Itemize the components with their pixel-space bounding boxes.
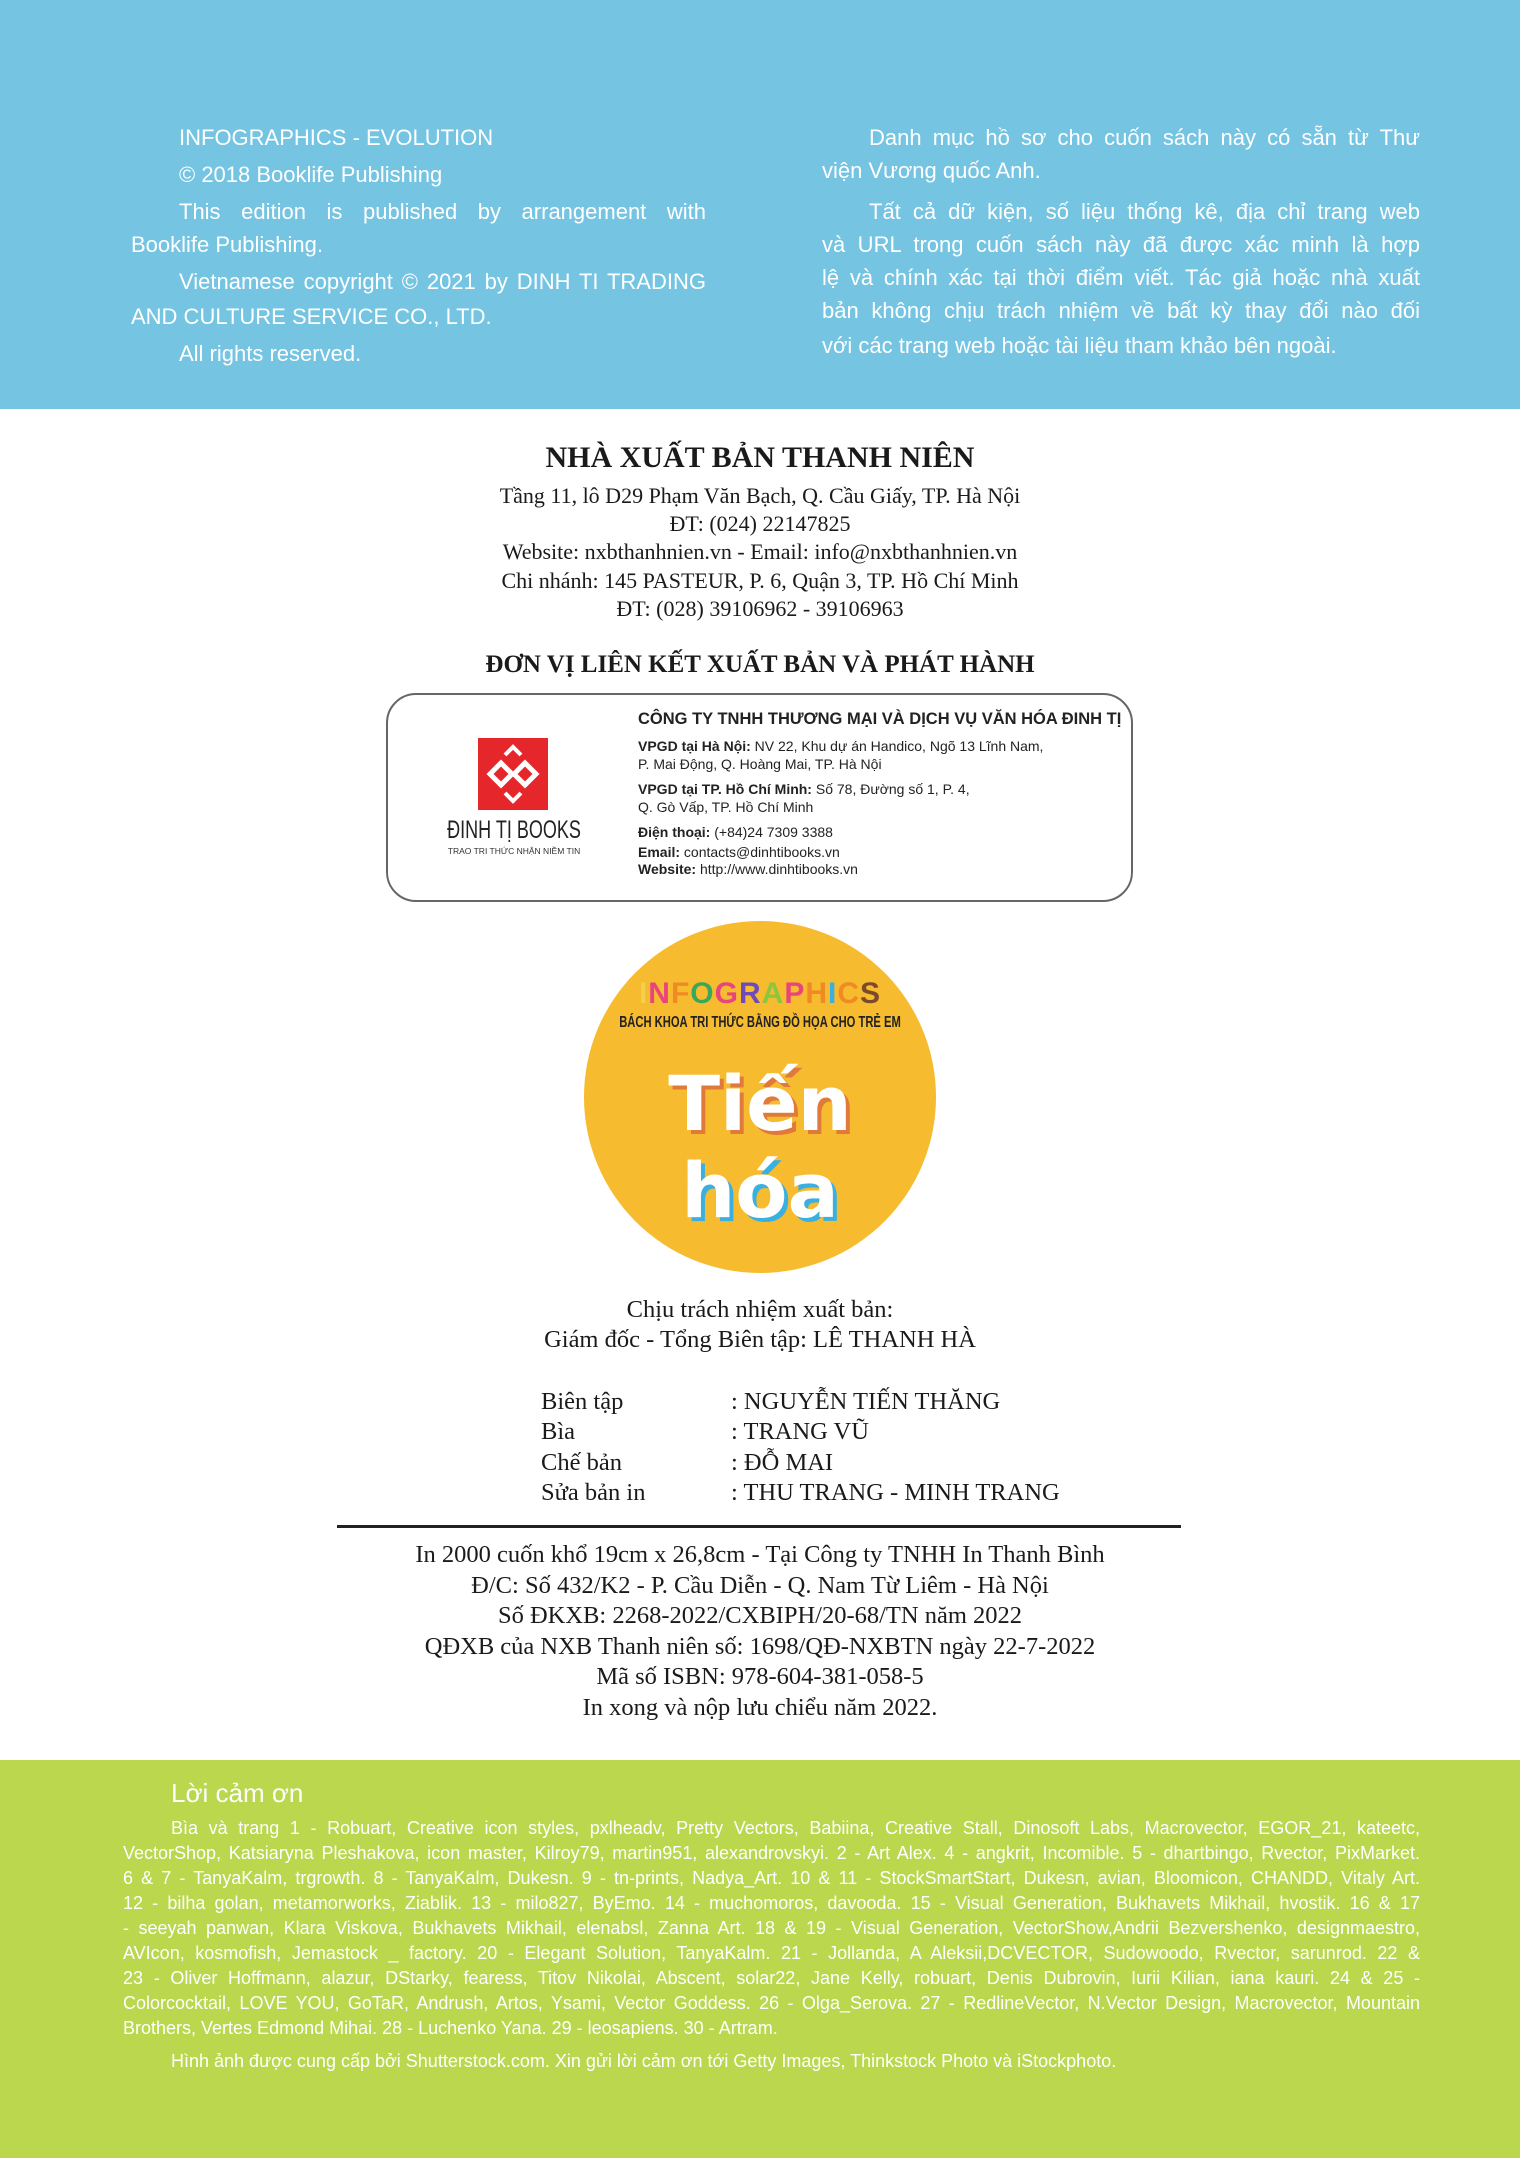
text block: credits list: 23 - Oliver Hoffmann, alazur, DStarky, fearess, Titov Nikolai, Abscent, solar22, Jane Kelly, robuart, Denis Dubrovin, Iurii Kilian, iana kauri. 24 & 25 - xyxy=(123,1968,1420,1988)
text block: publisher address: Tầng 11, lô D29 Phạm Văn Bạch, Q. Cầu Giấy, TP. Hà Nội xyxy=(500,483,1020,508)
heading: partner: ĐƠN VỊ LIÊN KẾT XUẤT BẢN VÀ PHÁT HÀNH xyxy=(485,651,1035,678)
text block: company info: Điện thoại: (+84)24 7309 3388 xyxy=(638,824,833,840)
text block: credits: : TRANG VŨ xyxy=(731,1418,869,1445)
text: logo name: ĐINH TỊ BOOKS xyxy=(447,816,581,844)
text block: left copyright: © 2018 Booklife Publishing xyxy=(179,162,442,187)
text block: credits list: AVIcon, kosmofish, Jemastock _ factory. 20 - Elegant Solution, TanyaKalm. 21 - Jollanda, A Aleksii,DCVECTOR, Sudowoodo, Rvector, sarunrod. 22 & xyxy=(123,1943,1420,1963)
text block: publisher address: ĐT: (024) 22147825 xyxy=(670,511,850,536)
text block: publisher address: ĐT: (028) 39106962 - 39106963 xyxy=(616,596,904,621)
text block: print info: Số ĐKXB: 2268-2022/CXBIPH/20-68/TN năm 2022 xyxy=(498,1602,1022,1629)
text block: print info: In 2000 cuốn khổ 19cm x 26,8cm - Tại Công ty TNHH In Thanh Bình xyxy=(415,1541,1105,1568)
panel: blue header xyxy=(0,0,1520,409)
text block: credits list: 6 & 7 - TanyaKalm, trgrowth. 8 - TanyaKalm, Dukesn. 9 - tn-prints, Nadya_Art. 10 & 11 - StockSmartStart, Dukesn, avian, Bloomicon, CHANDD, Vitaly Art. xyxy=(123,1868,1420,1888)
text block: print info: In xong và nộp lưu chiểu năm 2022. xyxy=(583,1694,937,1721)
text block: left copyright: All rights reserved. xyxy=(179,341,361,366)
text block: left copyright: This edition is published by arrangement with xyxy=(179,199,706,224)
text block: right notice: Tất cả dữ kiện, số liệu thống kê, địa chỉ trang web xyxy=(869,199,1420,224)
text: logo tagline: TRAO TRI THỨC NHẬN NIỀM TIN xyxy=(448,846,580,856)
text block: credits list: Hình ảnh được cung cấp bởi Shutterstock.com. Xin gửi lời cảm ơn tới Getty Images, Thinkstock Photo và iStockphoto. xyxy=(171,2051,1116,2071)
text block: credits: : ĐỖ MAI xyxy=(731,1449,833,1476)
heading: Lời cảm ơn: Lời cảm ơn xyxy=(171,1778,303,1808)
text block: company info: CÔNG TY TNHH THƯƠNG MẠI VÀ DỊCH VỤ VĂN HÓA ĐINH TỊ xyxy=(638,710,1121,728)
text block: credits list: Colorcocktail, LOVE YOU, GoTaR, Andrush, Artos, Ysami, Vector Goddess. 26 - Olga_Serova. 27 - RedlineVector, N.Vector Design, Macrovector, Mountain xyxy=(123,1993,1420,2013)
text block: credits: : THU TRANG - MINH TRANG xyxy=(731,1479,1060,1506)
text block: responsibility: Giám đốc - Tổng Biên tập: LÊ THANH HÀ xyxy=(544,1326,976,1353)
text block: left copyright: AND CULTURE SERVICE CO., LTD. xyxy=(131,304,492,329)
text block: company info: P. Mai Động, Q. Hoàng Mai, TP. Hà Nội xyxy=(638,756,882,772)
text block: left copyright: Booklife Publishing. xyxy=(131,232,323,257)
text block: credits: : NGUYỄN TIẾN THĂNG xyxy=(731,1388,1000,1415)
text block: credits list: 12 - bilha golan, metamorworks, Ziablik. 13 - milo827, ByEmo. 14 - muchomoros, davooda. 15 - Visual Generation, Bukhavets Mikhail, hvostik. 16 & 17 xyxy=(123,1893,1420,1913)
text block: right notice: lệ và chính xác tại thời điểm viết. Tác giả hoặc nhà xuất xyxy=(822,265,1420,290)
text block: company info: VPGD tại TP. Hồ Chí Minh: Số 78, Đường số 1, P. 4, xyxy=(638,781,970,797)
text block: credits list: VectorShop, Katsiaryna Pleshakova, icon master, Kilroy79, martin951, alexandrovskyi. 2 - Art Alex. 4 - angkrit, Incomible. 5 - dhartbingo, Rvector, PixMarket. xyxy=(123,1843,1420,1863)
text block: right notice: bản không chịu trách nhiệm về bất kỳ thay đổi nào đối xyxy=(822,298,1420,323)
text block: credits xyxy=(541,1386,1060,1506)
text block: credits list: Brothers, Vertes Edmond Mihai. 28 - Luchenko Yana. 29 - leosapiens. 30 - Artram. xyxy=(123,2018,778,2038)
panel: acknowledgements xyxy=(0,1760,1520,2158)
text block: right notice: với các trang web hoặc tài liệu tham khảo bên ngoài. xyxy=(822,333,1337,358)
text block: print info: Mã số ISBN: 978-604-381-058-5 xyxy=(596,1663,924,1690)
text block: credits list: - seeyah panwan, Klara Viskova, Bukhavets Mikhail, elenabsl, Zanna Art. 18 & 19 - Visual Generation, VectorShow,Andrii Bezvershenko, designmaestro, xyxy=(123,1918,1420,1938)
text block: credits: Sửa bản in xyxy=(541,1479,645,1506)
icon: Dinh Ti logo xyxy=(478,738,548,810)
text block: company info: Email: contacts@dinhtibooks.vn xyxy=(638,844,840,860)
text block: right notice: viện Vương quốc Anh. xyxy=(822,158,1041,183)
icon: book cover circle xyxy=(584,921,936,1273)
title: Tiến: Tiến xyxy=(668,1059,852,1148)
text block: print info: QĐXB của NXB Thanh niên số: 1698/QĐ-NXBTN ngày 22-7-2022 xyxy=(425,1633,1095,1660)
text block: credits: Biên tập xyxy=(541,1388,623,1415)
text block: company info xyxy=(638,708,1121,877)
text block: right notice xyxy=(822,125,1420,358)
text block: publisher address xyxy=(500,483,1020,621)
text block: company info: VPGD tại Hà Nội: NV 22, Khu dự án Handico, Ngõ 13 Lĩnh Nam, xyxy=(638,738,1043,754)
text block: credits: Bìa xyxy=(541,1418,575,1445)
text block: company info: Website: http://www.dinhtibooks.vn xyxy=(638,861,858,877)
subtitle: BÁCH KHOA TRI THỨC BẰNG ĐỒ HỌA CHO TRẺ EM xyxy=(619,1014,901,1031)
text block: responsibility xyxy=(544,1296,976,1353)
title: INFOGRAPHICS: INFOGRAPHICS xyxy=(639,977,881,1010)
text block: publisher address: Chi nhánh: 145 PASTEUR, P. 6, Quận 3, TP. Hồ Chí Minh xyxy=(501,568,1019,593)
text block: right notice: Danh mục hồ sơ cho cuốn sách này có sẵn từ Thư xyxy=(869,125,1420,150)
text block: right notice: và URL trong cuốn sách này đã được xác minh là hợp xyxy=(822,232,1420,257)
text block: left copyright: Vietnamese copyright © 2021 by DINH TI TRADING xyxy=(179,269,706,294)
text block: publisher address: Website: nxbthanhnien.vn - Email: info@nxbthanhnien.vn xyxy=(503,539,1017,564)
title: hóa: hóa xyxy=(681,1146,839,1235)
text block: left copyright: INFOGRAPHICS - EVOLUTION xyxy=(179,125,493,150)
text block: credits: Chế bản xyxy=(541,1449,622,1476)
text block: responsibility: Chịu trách nhiệm xuất bản: xyxy=(627,1296,893,1323)
panel: Dinh Ti box xyxy=(386,693,1133,902)
text block: print info xyxy=(415,1541,1105,1721)
text block: company info: Q. Gò Vấp, TP. Hồ Chí Minh xyxy=(638,799,813,815)
text block: print info: Đ/C: Số 432/K2 - P. Cầu Diễn - Q. Nam Từ Liêm - Hà Nội xyxy=(471,1572,1049,1599)
text block: credits list: Bìa và trang 1 - Robuart, Creative icon styles, pxlheadv, Pretty Vectors, Babiina, Creative Stall, Dinosoft Labs, Macrovector, EGOR_21, kateetc, xyxy=(171,1818,1420,1838)
text block: credits list xyxy=(123,1818,1420,2071)
heading: publisher: NHÀ XUẤT BẢN THANH NIÊN xyxy=(546,441,974,474)
text block: left copyright xyxy=(131,125,706,366)
